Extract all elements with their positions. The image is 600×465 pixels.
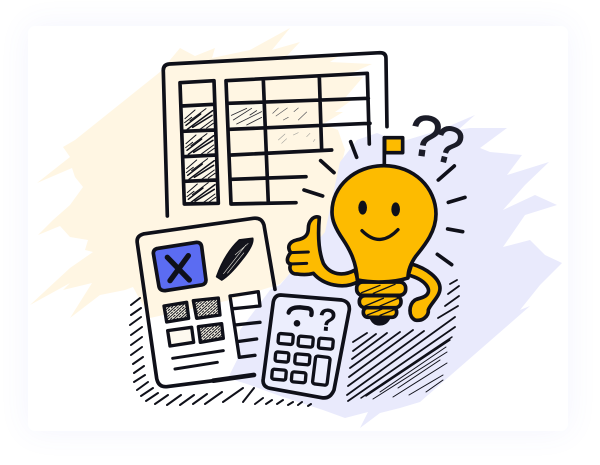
shadow hatching: right of bulb: [347, 280, 459, 401]
list column: [230, 292, 260, 357]
document outline: [137, 218, 275, 387]
thumbs-up arm: [287, 217, 358, 286]
calculator: [263, 295, 349, 398]
pencil scribble: [217, 238, 253, 280]
yellow brush background: [30, 28, 372, 318]
text lines: [173, 351, 223, 369]
shadow hatching: left and bottom of document: [130, 298, 311, 406]
right arm: [408, 264, 440, 320]
bulb body: [332, 166, 436, 282]
panel: white card: [28, 26, 568, 431]
blue checkbox with X: [153, 242, 206, 291]
document sheet: [137, 218, 275, 387]
calculator display: ?: [317, 303, 337, 338]
calculator body: [263, 295, 349, 398]
eyes: [358, 201, 367, 215]
question mark: ?: [405, 102, 446, 171]
screw threads: [357, 282, 406, 317]
question mark: ?: [427, 114, 469, 177]
lightbulb character: [287, 138, 465, 326]
sheet outline: [163, 53, 387, 216]
small hatched cells: [164, 298, 223, 346]
calculator buttons: [272, 333, 333, 385]
lavender brush background: [228, 115, 562, 428]
smile: [362, 230, 398, 239]
light rays: [304, 142, 465, 265]
spreadsheet sheet: [163, 53, 387, 216]
bulb cap: [369, 316, 391, 326]
flag: [384, 138, 403, 164]
sidebar column: [180, 81, 218, 204]
main table: [226, 73, 370, 204]
